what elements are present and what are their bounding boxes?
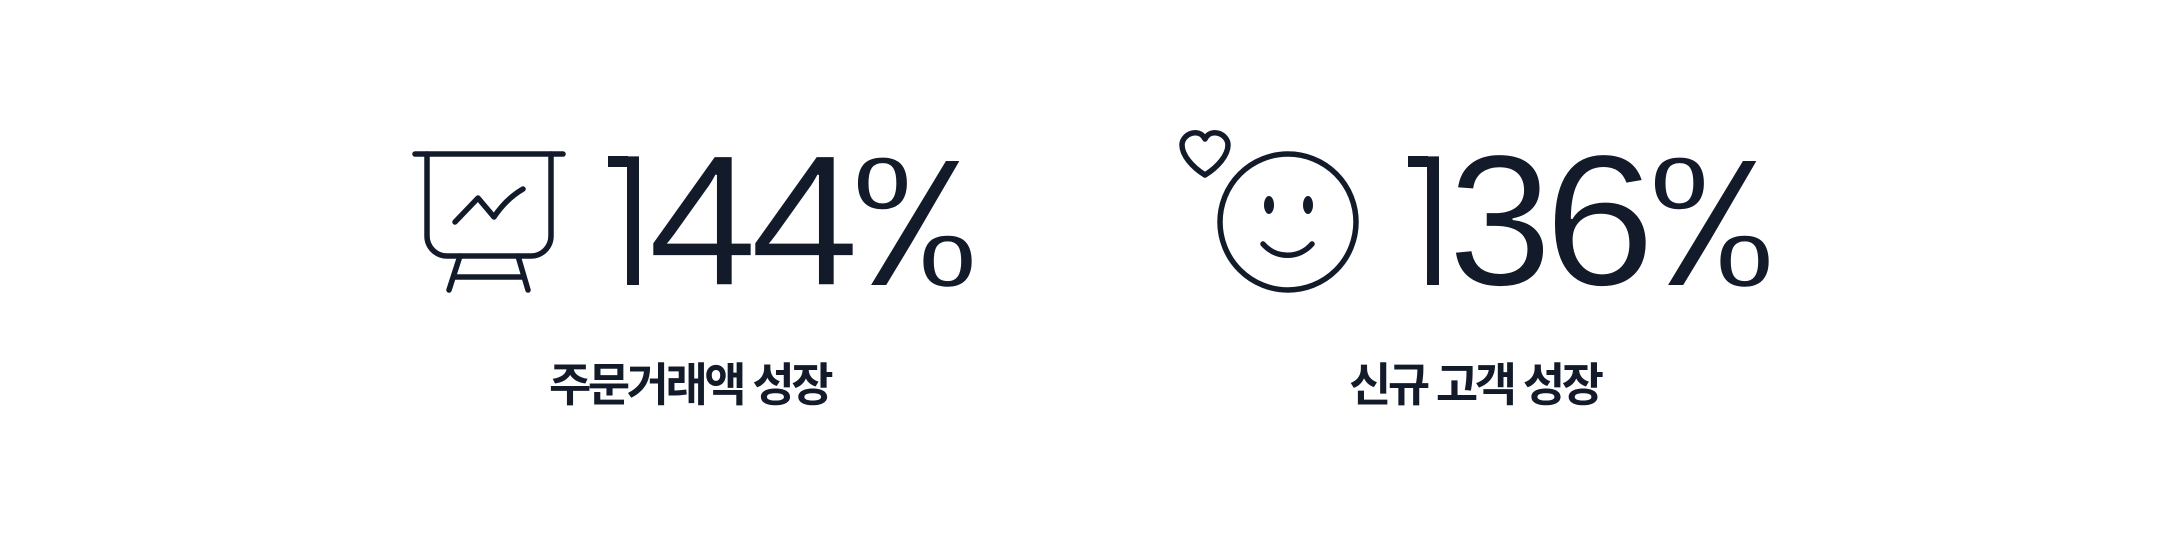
number: 136%: 1 xyxy=(1380,116,1484,325)
number: 136%: % xyxy=(1634,179,1775,312)
number: 144%: 4 xyxy=(648,115,757,325)
number: 144%: % xyxy=(852,132,995,266)
number: 144%: 1 xyxy=(579,116,683,325)
number: 144% xyxy=(608,156,972,287)
icon: presentation board with chart xyxy=(415,154,563,290)
number: 144%: 4 xyxy=(750,115,859,325)
number: 136% xyxy=(1408,155,1769,287)
number: 136%: % xyxy=(1649,132,1792,266)
number: 136%: 6 xyxy=(1544,117,1655,326)
number: 136%: 3 xyxy=(1448,116,1552,325)
label: new customer growth: 신규 고객 성장 xyxy=(1349,359,1604,411)
number: 136%: % xyxy=(1640,125,1786,323)
icon: smiling face with heart xyxy=(1182,133,1356,290)
panel: order volume growth xyxy=(412,151,972,406)
number: 144%: % xyxy=(842,125,989,323)
number: 144%: % xyxy=(836,179,978,312)
panel: new customer growth xyxy=(1182,116,1792,411)
label: order volume growth: 주문거래액 성장 xyxy=(549,359,833,411)
